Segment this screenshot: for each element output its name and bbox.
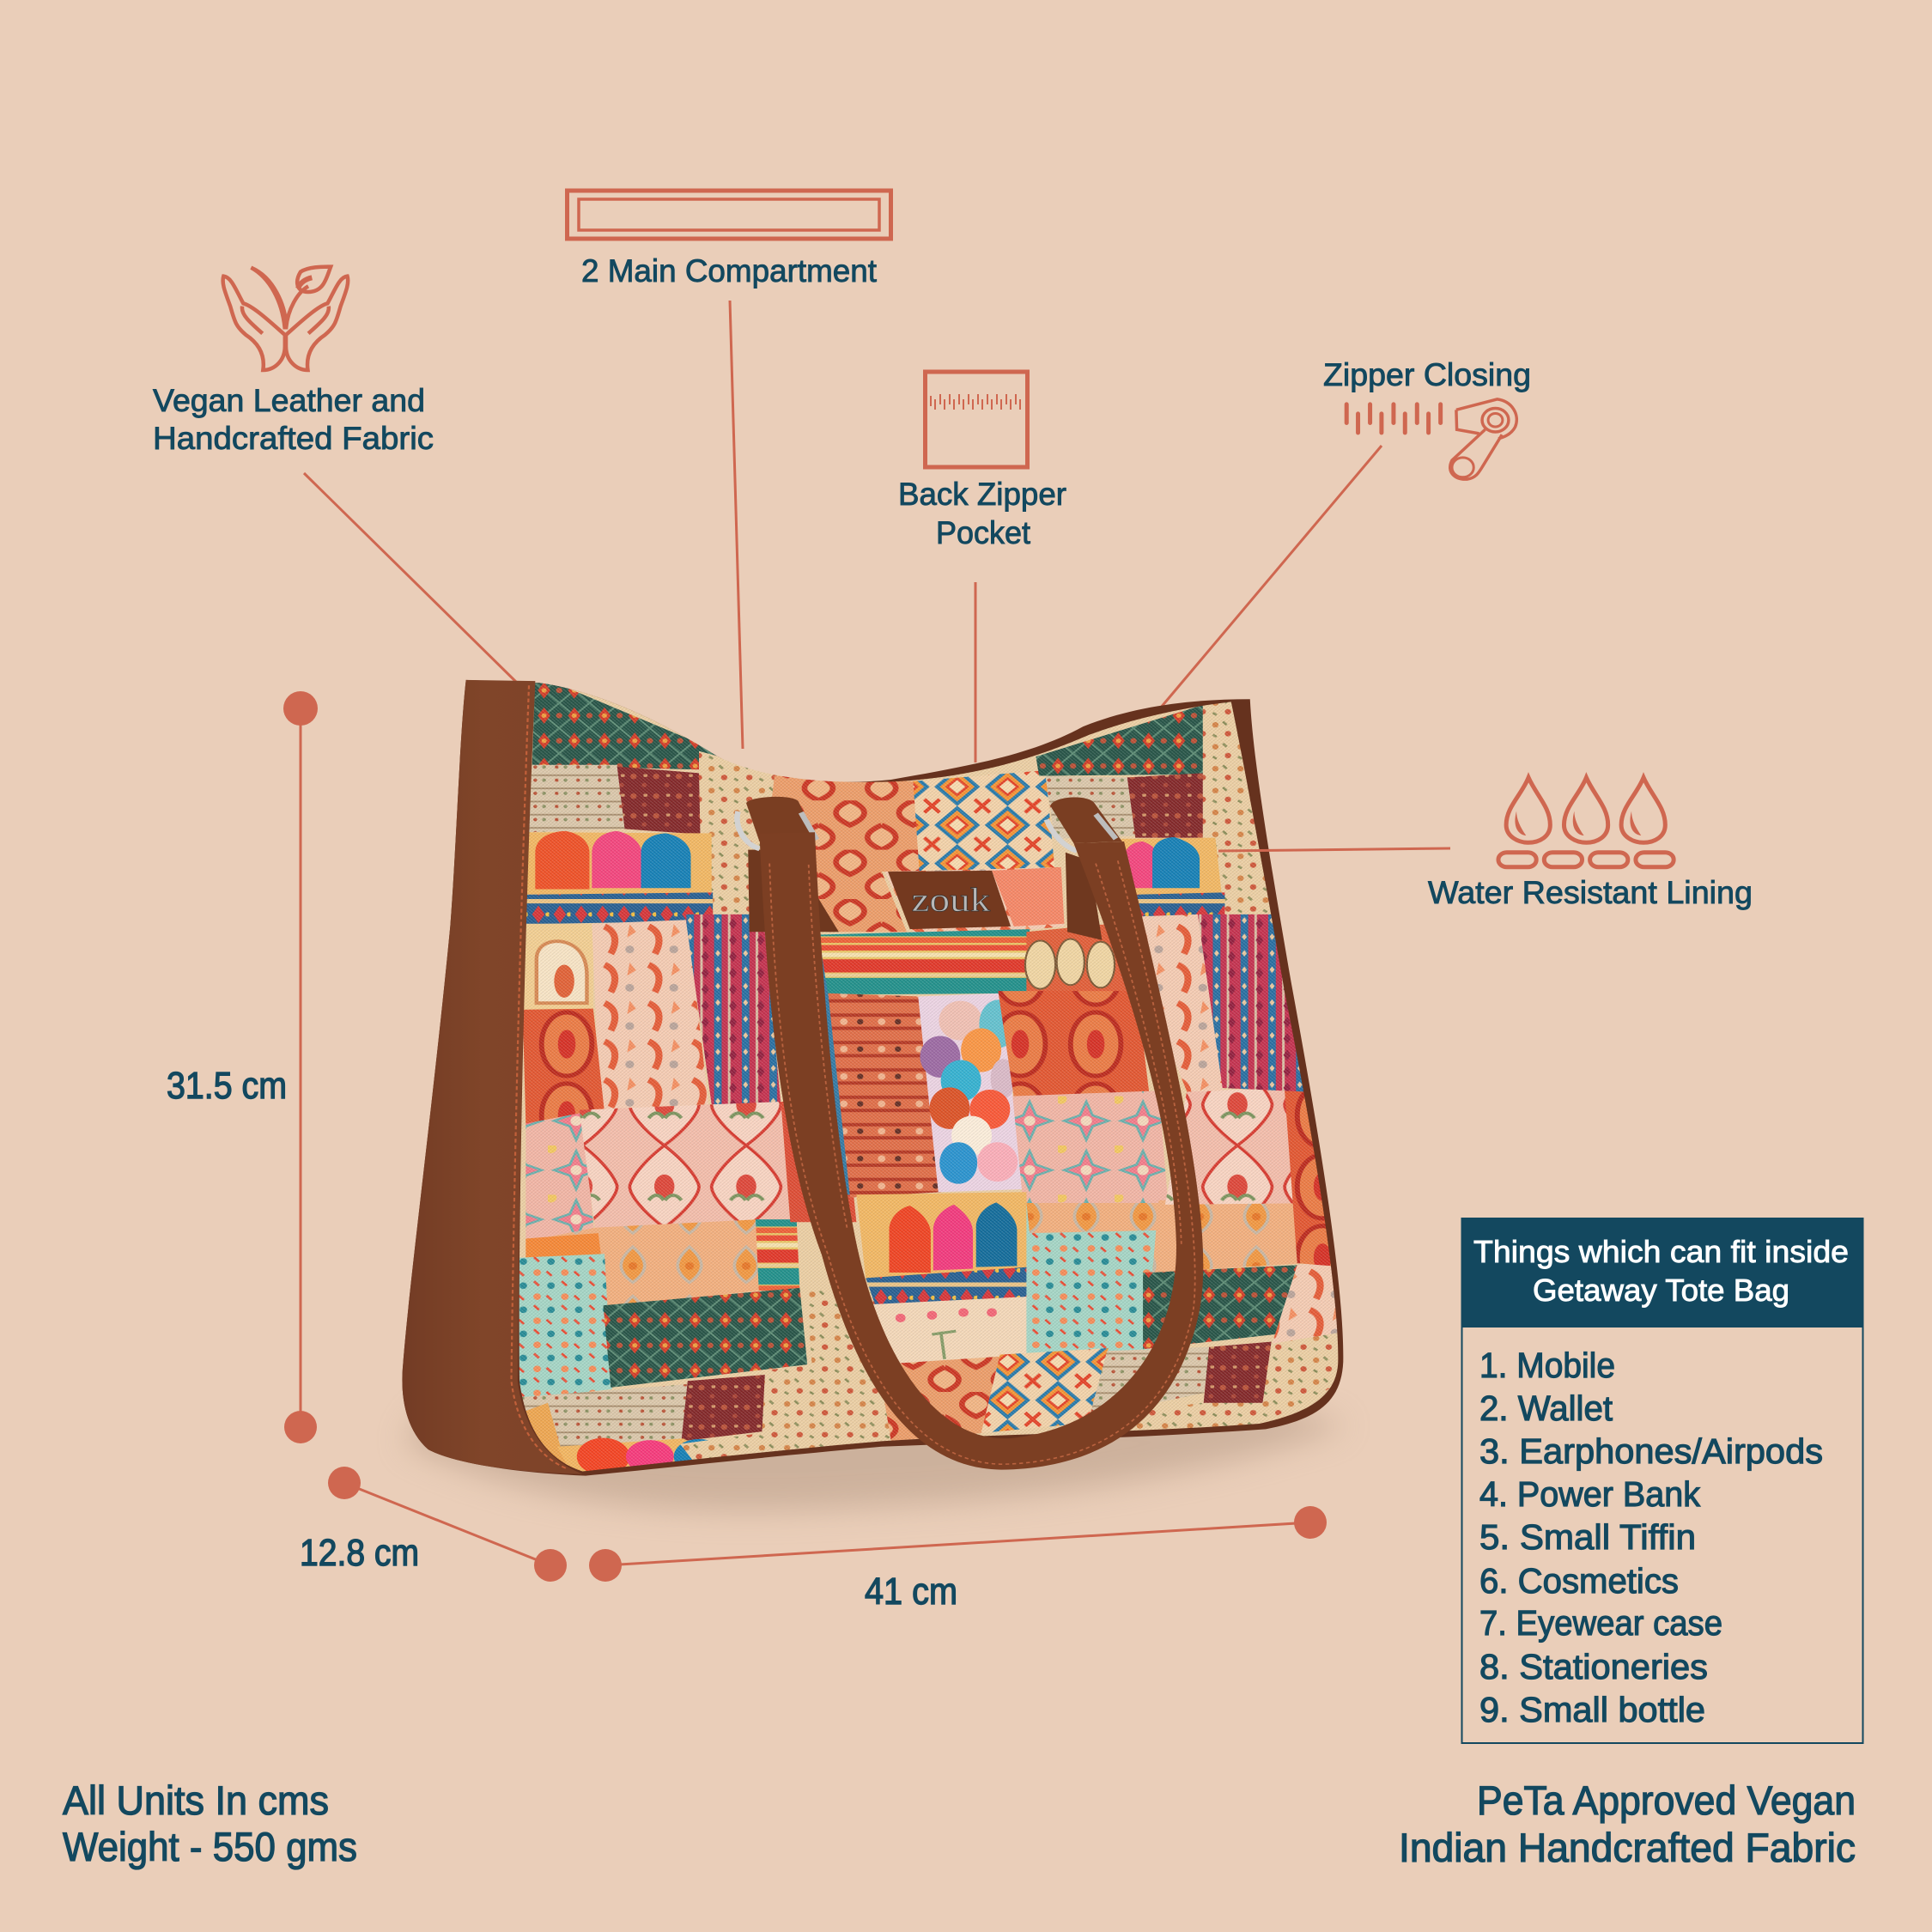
dimension: height: 31.5 cm (167, 1065, 287, 1107)
left side gusset (402, 680, 582, 1474)
label: zipper closing: Zipper Closing (1323, 357, 1531, 392)
panel: things which can fit inside (1461, 1218, 1863, 1743)
item list: 1. Mobile (1479, 1346, 1615, 1385)
item list: 9. Small bottle (1479, 1690, 1705, 1729)
gusset and panel stitching (511, 685, 567, 1468)
footer note: units and weight: Weight - 550 gms (63, 1824, 357, 1869)
leader line: zipper closing (1160, 446, 1382, 708)
item list: 6. Cosmetics (1479, 1561, 1679, 1601)
shoulder straps (759, 832, 1203, 1470)
tote bag illustration (402, 675, 1354, 1485)
item list: 5. Small Tiffin (1479, 1517, 1696, 1557)
arches: bottom left (577, 1437, 709, 1471)
label: back zipper pocket: Pocket (936, 515, 1031, 550)
item list: 3. Earphones/Airpods (1479, 1431, 1823, 1471)
label: vegan leather: Handcrafted Fabric (153, 421, 434, 456)
bag floor shadow (404, 1408, 1348, 1510)
multicolour ogee lattice (920, 999, 1018, 1184)
item list (1479, 1346, 1823, 1729)
item list: 7. Eyewear case (1479, 1603, 1722, 1643)
cream arch row (1025, 939, 1115, 989)
leader line: vegan leather (304, 473, 519, 684)
label: back zipper pocket (898, 477, 1066, 550)
item list: 8. Stationeries (1479, 1647, 1708, 1686)
footer note: vegan and handcrafted (1399, 1777, 1856, 1870)
brand label: zouk (912, 882, 991, 919)
icon: back zipper pocket (926, 372, 1027, 467)
dimension: depth: 12.8 cm (300, 1532, 419, 1574)
right strap tab (1047, 797, 1122, 940)
dimension: width: 41 cm (865, 1571, 957, 1613)
footer note: vegan and handcrafted: PeTa Approved Vegan (1477, 1777, 1856, 1823)
label: back zipper pocket: Back Zipper (898, 477, 1066, 512)
icon: zipper (1346, 399, 1516, 479)
item list: 2. Wallet (1479, 1388, 1613, 1428)
footer note: vegan and handcrafted: Indian Handcrafted Fabric (1399, 1825, 1856, 1870)
panel heading (1473, 1234, 1849, 1308)
arches: upper left (535, 831, 690, 890)
dimension: depth (300, 1467, 567, 1582)
dimension: height (167, 691, 318, 1443)
footer note: units and weight: All Units In cms (63, 1777, 329, 1823)
label: main compartment: 2 Main Compartment (581, 253, 878, 289)
item list: 4. Power Bank (1479, 1474, 1700, 1514)
icon: water drops and lining (1498, 778, 1674, 867)
label: vegan leather (153, 383, 434, 456)
label: water resistant lining: Water Resistant Lining (1428, 875, 1753, 910)
floral dots (896, 1308, 997, 1359)
panel header (1461, 1218, 1863, 1327)
panel heading: Things which can fit inside (1473, 1234, 1849, 1269)
icon: main compartment (567, 191, 891, 239)
left strap tab (737, 797, 839, 932)
panel border (1461, 1218, 1863, 1743)
arches: upper right (1124, 837, 1200, 888)
fine fabric weave (504, 675, 1354, 1485)
label: vegan leather: Vegan Leather and (153, 383, 425, 418)
leader line: back zipper pocket (974, 582, 977, 762)
arches: centre (890, 1202, 1017, 1273)
panel heading: Getaway Tote Bag (1533, 1273, 1789, 1308)
bag body leather (402, 680, 1343, 1476)
leader line: main compartment (730, 301, 743, 749)
patchwork fabric panel (504, 675, 1354, 1485)
brand label (888, 871, 1011, 929)
icon: hands holding leaf (223, 267, 348, 370)
dimension: width (589, 1506, 1327, 1613)
footer note: units and weight (63, 1777, 357, 1869)
leader line: water resistant lining (1218, 848, 1450, 851)
